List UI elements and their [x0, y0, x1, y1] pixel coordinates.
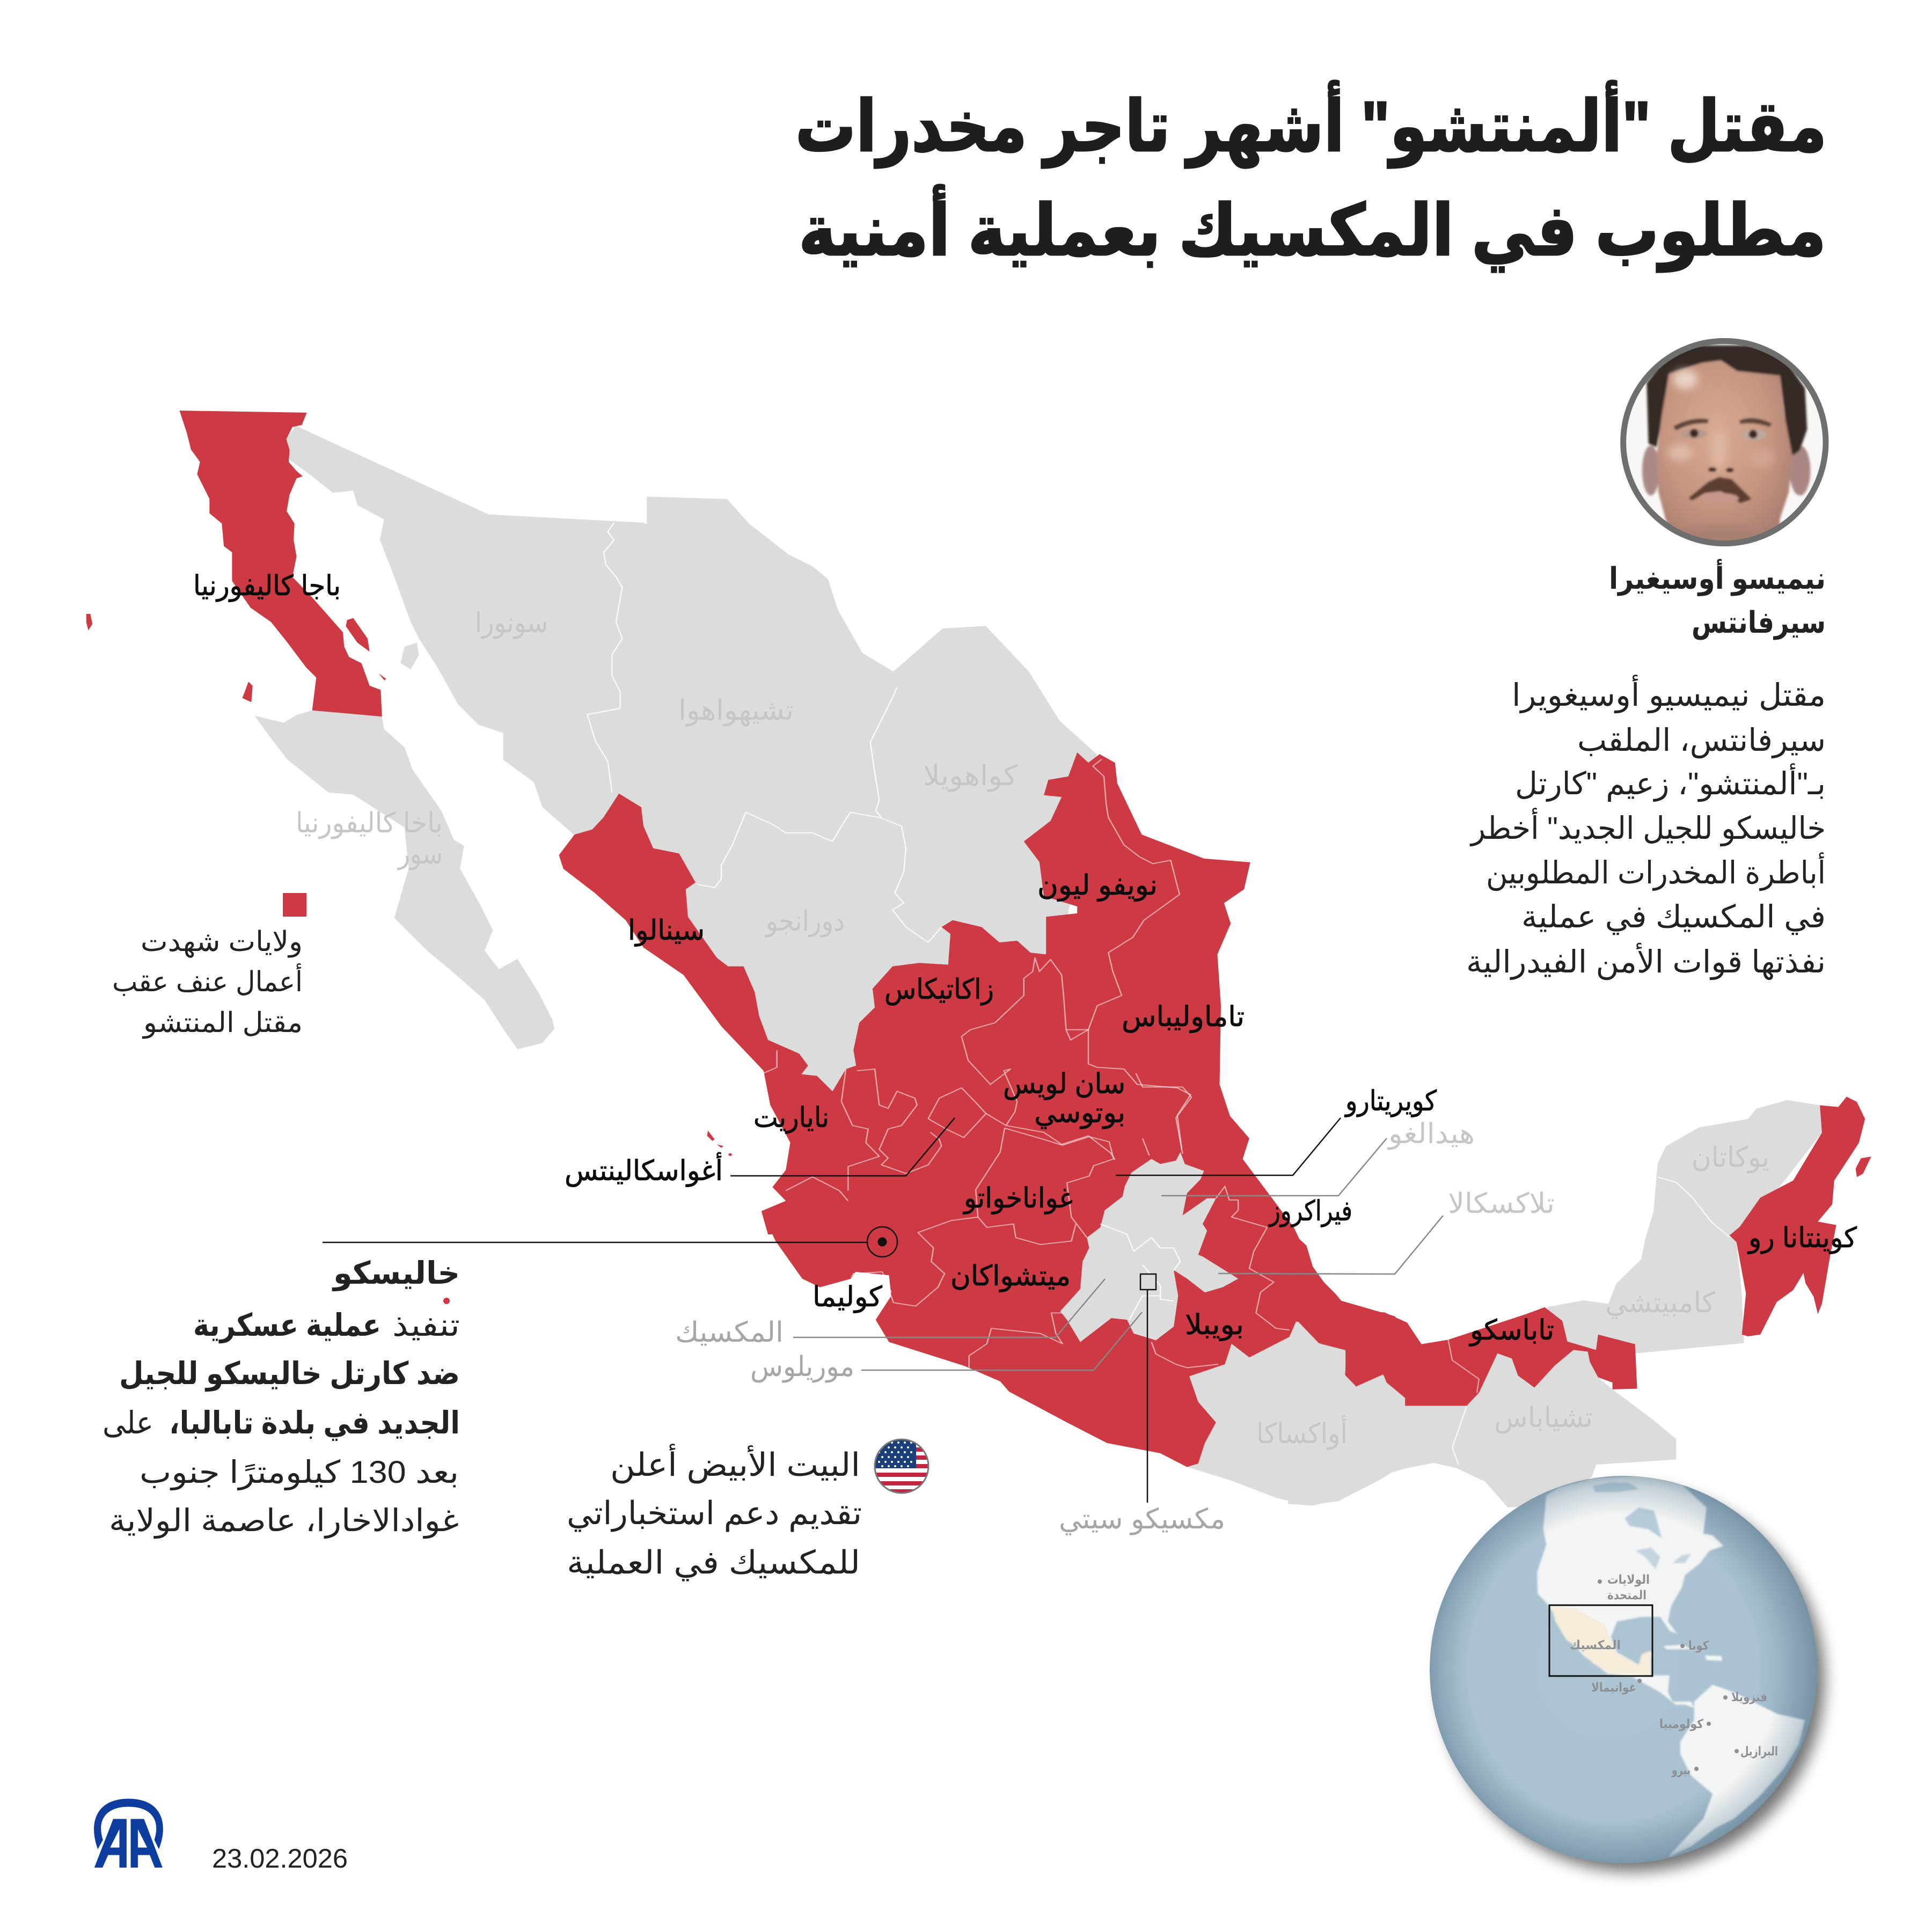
labels: other states: أواكساكا [1256, 1415, 1348, 1450]
legend: مقتل المنتشو [142, 1007, 303, 1039]
South America [1668, 1685, 1805, 1857]
labels: violence states: بوتوسي [1034, 1097, 1125, 1129]
labels: violence states: نويفو ليون [1037, 870, 1158, 902]
White House text: للمكسيك في العملية [567, 1545, 860, 1582]
state borders in red area [762, 759, 1479, 1393]
Jalisco text [103, 1256, 460, 1539]
labels: other states: سور [397, 839, 443, 870]
globe labels: المكسيك [1570, 1638, 1621, 1652]
labels: violence states: سينالوا [628, 915, 705, 947]
labels: violence states: كويريتارو [1344, 1086, 1437, 1117]
labels: other states: كواهويلا [923, 760, 1018, 792]
title [795, 80, 1827, 273]
globe labels: كولومبيا [1659, 1717, 1704, 1731]
biography text: أباطرة المخدرات المطلوبين [1486, 852, 1826, 891]
labels: other states: دورانجو [764, 906, 845, 938]
grey states [254, 426, 1822, 1507]
labels: other states: هيدالغو [1387, 1118, 1475, 1150]
Jalisco text: غوادالاخارا، عاصمة الولاية [109, 1503, 459, 1539]
name [1609, 559, 1826, 640]
labels: violence states: غواناخواتو [962, 1183, 1073, 1214]
Jalisco text: على [103, 1406, 153, 1440]
Jalisco text: تنفيذ [392, 1308, 460, 1343]
biography text: مقتل نيميسيو أوسيغويرا [1512, 675, 1826, 714]
labels: violence states: بويبلا [1185, 1309, 1244, 1341]
biography text: سيرفانتس، الملقب [1577, 723, 1826, 759]
North America [1537, 1475, 1723, 1708]
legend [112, 893, 306, 1039]
globe labels: البرازيل [1740, 1744, 1778, 1759]
labels: violence states: باجا كاليفورنيا [193, 570, 341, 602]
globe labels: فنزويلا [1731, 1690, 1767, 1704]
labels: other states: موريلوس [750, 1351, 854, 1383]
icon: US flag [874, 1438, 930, 1494]
Jalisco text: عملية عسكرية [193, 1308, 381, 1344]
globe labels: بيرو [1671, 1763, 1690, 1777]
labels: violence states: سان لويس [1003, 1069, 1125, 1100]
logo: Anadolu Agency [94, 1799, 163, 1868]
biography text: خاليسكو للجيل الجديد" أخطر [1469, 808, 1826, 847]
date: 23.02.2026 [212, 1843, 348, 1874]
labels: violence states: كوليما [813, 1282, 882, 1313]
labels: violence states: زاكاتيكاس [884, 974, 994, 1006]
labels: violence states: ميتشواكان [950, 1261, 1071, 1292]
labels: other states: سونورا [475, 608, 548, 639]
Mexico [1551, 1606, 1651, 1675]
globe labels: الولايات [1607, 1572, 1650, 1587]
name: سيرفانتس [1692, 605, 1826, 640]
map of Mexico [86, 411, 1871, 1535]
labels: violence states: كوينتانا رو [1747, 1223, 1857, 1254]
name: نيميسو أوسيغيرا [1609, 559, 1826, 596]
leader lines [730, 1118, 1443, 1503]
White House text: البيت الأبيض أعلن [610, 1444, 860, 1484]
Jalisco marker and leader [323, 1227, 897, 1257]
Jalisco text: خاليسكو [332, 1256, 460, 1292]
labels: violence states: ناياريت [753, 1102, 829, 1134]
globe labels: غواتيمالا [1591, 1680, 1636, 1695]
labels: other states: يوكاتان [1692, 1142, 1769, 1174]
labels: other states: كامبيتشي [1605, 1287, 1715, 1319]
biography text: بـ"ألمنتشو"، زعيم "كارتل [1515, 763, 1826, 802]
White House text: تقديم دعم استخباراتي [567, 1495, 862, 1532]
red states [86, 411, 1871, 1467]
biography text: نفذتها قوات الأمن الفيدرالية [1466, 942, 1826, 980]
biography text: في المكسيك في عملية [1521, 899, 1826, 935]
labels: other states [296, 608, 1769, 1535]
labels: other states: المكسيك [675, 1317, 784, 1348]
labels: other states: تشيهواهوا [678, 695, 794, 727]
labels: violence states: فيراكروز [1268, 1196, 1352, 1227]
Jalisco text: ضد كارتل خاليسكو للجيل [119, 1356, 460, 1392]
legend: ولايات شهدت [141, 926, 303, 958]
globe labels [1570, 1572, 1778, 1777]
biography text [1466, 675, 1826, 980]
labels: violence states: أغواسكالينتس [565, 1152, 723, 1187]
Jalisco text: بعد 130 كيلومترًا جنوب [140, 1455, 459, 1491]
White House text [567, 1444, 862, 1582]
globe labels: المتحدة [1607, 1588, 1646, 1602]
labels: other states: تشياباس [1494, 1402, 1593, 1434]
labels: other states: تلاكسكالا [1448, 1188, 1555, 1219]
labels: violence states [193, 570, 1857, 1346]
globe labels: كوبا [1688, 1638, 1709, 1653]
Caribbean [1663, 1644, 1697, 1652]
central grey states [1060, 1152, 1238, 1342]
locator globe [1430, 1475, 1825, 1872]
Jalisco text: الجديد في بلدة تابالبا،‏ [169, 1406, 460, 1441]
labels: other states: باخا كاليفورنيا [296, 808, 443, 839]
labels: other states: مكسيكو سيتي [1059, 1504, 1225, 1535]
labels: violence states: تاباسكو [1468, 1315, 1554, 1346]
portrait [1623, 341, 1826, 554]
legend: أعمال عنف عقب [112, 963, 303, 998]
title: مطلوب في المكسيك بعملية أمنية [799, 185, 1826, 273]
grey state borders [587, 523, 1730, 1465]
labels: violence states: تاماوليباس [1122, 1001, 1245, 1033]
